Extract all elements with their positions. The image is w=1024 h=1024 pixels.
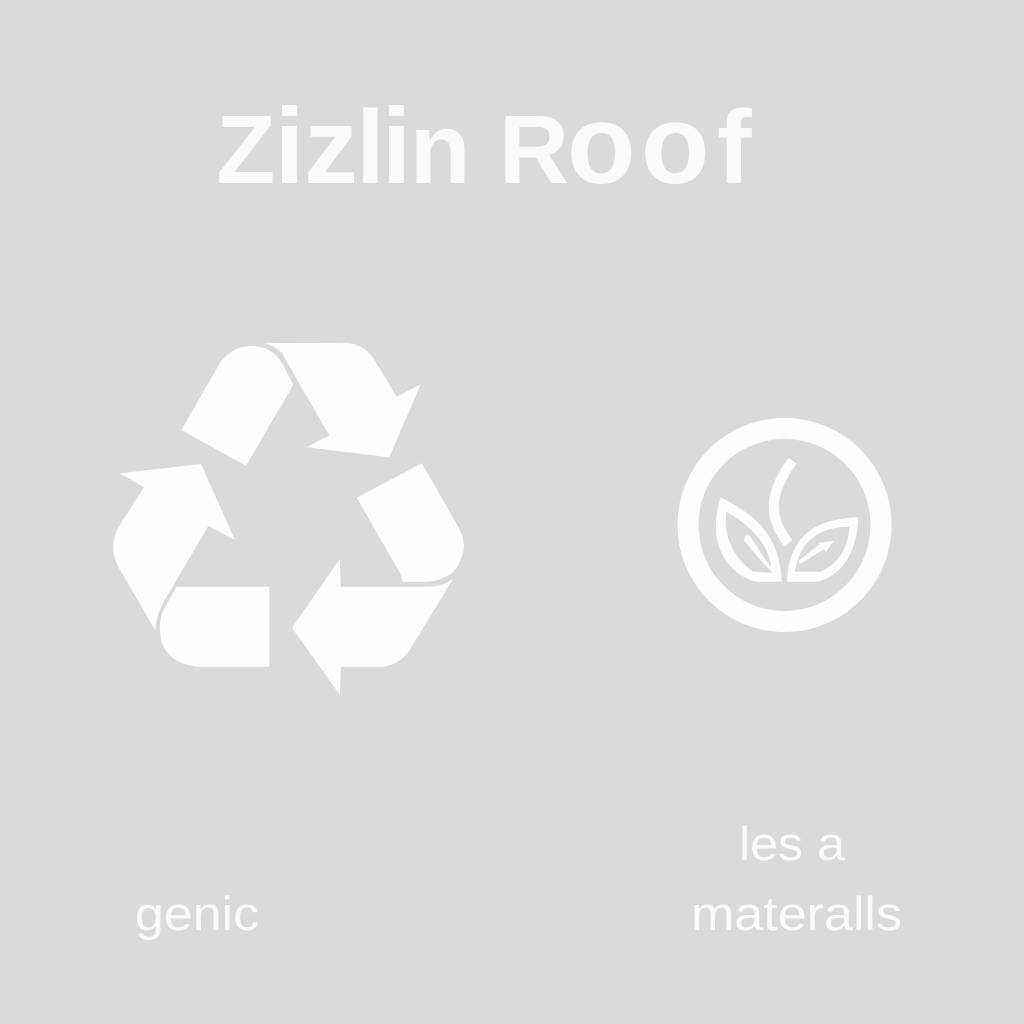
recycling: top-right arrow	[263, 343, 421, 457]
title: o	[641, 82, 709, 207]
left leaf midrib	[744, 535, 772, 572]
recycling: right block	[357, 463, 464, 582]
right leaf midrib	[798, 541, 834, 564]
recycling: bottom block	[160, 587, 269, 667]
label: les a: les a	[739, 817, 846, 870]
title: n	[410, 93, 471, 205]
badge ring	[688, 428, 881, 622]
left leaf	[716, 497, 782, 582]
recycling: top block	[181, 346, 293, 466]
label: materalls: materalls	[691, 887, 902, 940]
title: R	[499, 95, 569, 204]
title: Z	[216, 95, 275, 204]
icon: recycling symbol	[113, 343, 464, 695]
title: i	[382, 85, 412, 206]
title: o	[567, 82, 635, 207]
label: genic: genic	[135, 887, 259, 940]
title: i	[274, 85, 305, 206]
title: f	[717, 90, 752, 206]
recycling: bottom-right arrow	[292, 559, 453, 695]
sprout stem	[774, 461, 793, 543]
icon: leaf badge	[688, 428, 881, 622]
right leaf	[787, 517, 858, 582]
title: l	[356, 90, 385, 206]
recycling: left arrow	[113, 464, 235, 630]
title: z	[304, 85, 358, 206]
